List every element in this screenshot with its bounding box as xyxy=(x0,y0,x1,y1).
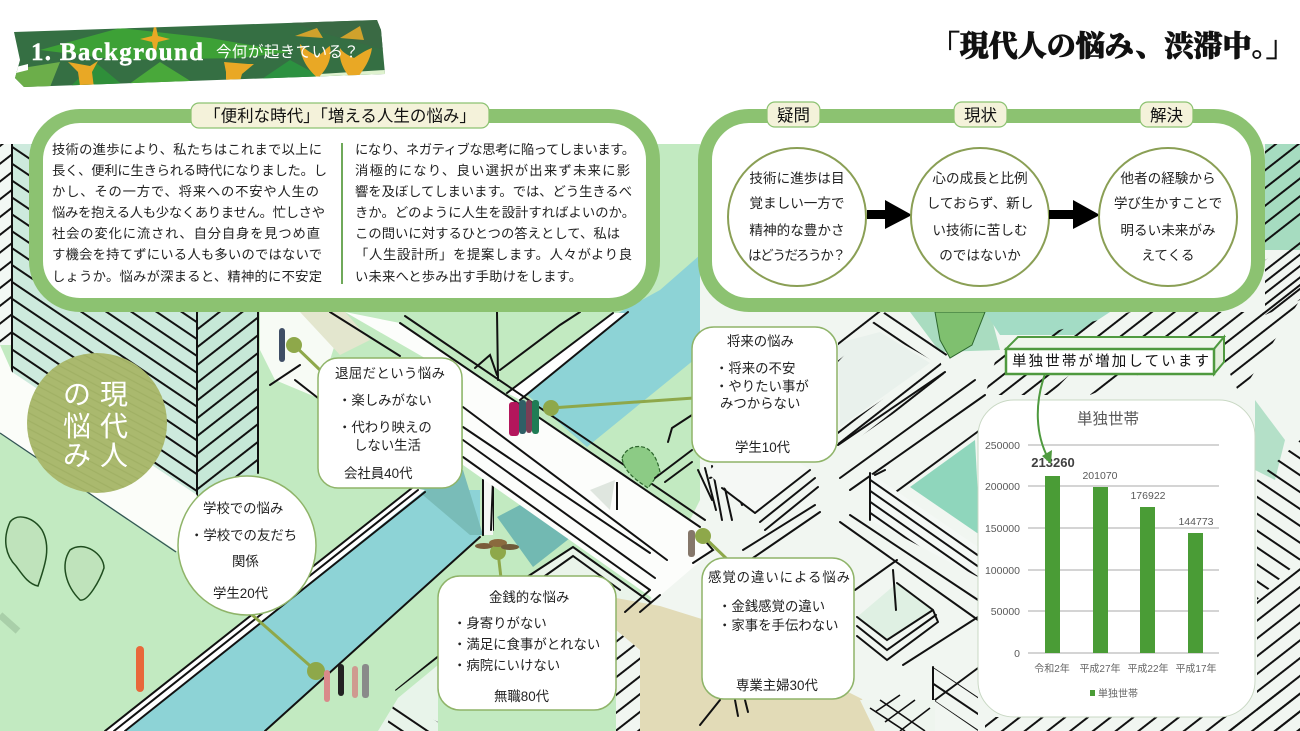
circle: status xyxy=(911,148,1049,286)
circle: question: はどうだろうか？ xyxy=(748,248,846,263)
text block: right column: きか。どのように人生を設計すればよいのか。 xyxy=(355,205,635,220)
callout: single households increasing: 単独世帯が増加しています xyxy=(1012,353,1209,370)
people: housewife xyxy=(688,530,695,557)
block C xyxy=(871,474,898,501)
value labels: 176922 xyxy=(1130,490,1166,502)
callout: sense of values: 専業主婦30代 xyxy=(736,677,818,693)
value labels: 144773 xyxy=(1178,516,1214,528)
badge: 現代人の悩み: 代 xyxy=(100,411,128,442)
header ribbon: 1. Background xyxy=(14,20,385,87)
text block: left column: 悩みを抱える人も少なくありません。忙しさや xyxy=(52,205,325,220)
bridge xyxy=(345,312,713,600)
text block: right column: 消極的になり、良い選択が出来ず未来に影 xyxy=(355,163,630,178)
x axis labels: 平成22年 xyxy=(1127,662,1169,675)
arrow: callout to chart xyxy=(1038,374,1052,464)
people: woman in orange xyxy=(136,646,144,692)
chart title: 単独世帯 xyxy=(1077,410,1139,428)
text block: right column: 「人生設計所」を提案します。人々がより良 xyxy=(355,247,632,262)
people: student group xyxy=(324,664,369,702)
lower centre buildings xyxy=(378,665,438,731)
callout: school: ・学校での友だち xyxy=(190,528,297,543)
callout: single households increasing xyxy=(1006,337,1224,374)
callout: boredom: ・代わり映えの xyxy=(338,420,432,435)
building south of bridge xyxy=(532,548,650,604)
callout: sense of values: 感覚の違いによる悩み xyxy=(708,569,850,585)
block D xyxy=(857,583,933,640)
callout: future xyxy=(692,327,837,462)
text block: right column: い未来へと歩み出す手助けをします。 xyxy=(355,269,582,284)
tag: 現状: 現状 xyxy=(964,106,998,125)
circle: solution: 他者の経験から xyxy=(1120,171,1216,186)
text block: left column xyxy=(52,142,327,284)
circle: question: 精神的な豊かさ xyxy=(749,223,845,238)
connectors and people xyxy=(136,328,730,702)
callout: school: 学校での悩み xyxy=(203,501,283,516)
x axis labels: 平成27年 xyxy=(1079,662,1121,675)
circle: question xyxy=(728,148,866,286)
text block: left column: かし、その一方で、将来への不安や人生の xyxy=(52,184,319,199)
header ribbon: 1. Background: 今何が起きている？ xyxy=(216,43,359,61)
value labels xyxy=(1031,455,1214,528)
circle: solution xyxy=(1099,148,1237,286)
circle: solution: 学び生かすことで xyxy=(1114,196,1222,211)
bars xyxy=(1045,476,1203,653)
tag: 解決 xyxy=(1140,102,1193,127)
panel: background explanation xyxy=(36,103,653,305)
value labels: 213260 xyxy=(1031,455,1075,470)
circle: status: のではないか xyxy=(939,248,1021,263)
callout: boredom: しない生活 xyxy=(354,438,421,453)
text block: right column: 響を及ぼしてしまいます。では、どう生きるべ xyxy=(355,184,632,199)
circle: status: 心の成長と比例 xyxy=(932,171,1028,186)
upper canal xyxy=(525,255,700,447)
text block: left column: す機会を持てずにいる人も多いのではないで xyxy=(52,247,322,262)
text block: left column: 社会の変化に流され、自分自身を見つめ直 xyxy=(52,226,320,241)
heading: 便利な時代: 「便利な時代」「増える人生の悩み」 xyxy=(204,106,476,126)
text block: right column xyxy=(355,141,635,284)
value labels: 201070 xyxy=(1082,470,1118,482)
block A xyxy=(838,332,930,427)
left building xyxy=(12,144,197,495)
callout: sense of values: ・金銭感覚の違い xyxy=(718,598,825,614)
gridlines and y axis: 0 xyxy=(1014,648,1020,660)
beige plaza xyxy=(616,598,875,731)
right side strips xyxy=(985,312,1130,395)
people: students on bridge xyxy=(509,400,539,436)
badge: 現代人の悩み: の xyxy=(63,379,91,410)
tag: 解決: 解決 xyxy=(1150,106,1183,125)
block B xyxy=(707,465,742,502)
circle: solution: 明るい未来がみ xyxy=(1120,223,1216,238)
x axis labels xyxy=(1034,662,1217,675)
gridlines and y axis: 50000 xyxy=(991,606,1020,618)
panel: question, status, solution xyxy=(705,102,1258,305)
circle: question: 技術に進歩は目 xyxy=(749,171,845,186)
gridlines and y axis: 100000 xyxy=(985,565,1020,577)
callout: money: ・身寄りがない xyxy=(453,616,547,631)
text block: left column: 技術の進歩により、私たちはこれまで以上に xyxy=(52,142,322,157)
callout: sense of values: ・家事を手伝わない xyxy=(718,618,839,633)
arrow xyxy=(867,200,912,229)
text block: right column: になり、ネガティブな思考に陥ってしまいます。 xyxy=(355,141,635,157)
callout: school: 関係 xyxy=(232,554,259,569)
callout: future: みつからない xyxy=(720,396,800,411)
text block: left column: しょうか。悩みが深まると、精神的に不安定 xyxy=(52,269,322,284)
callout: money: 無職80代 xyxy=(494,689,550,704)
callout: future: 将来の悩み xyxy=(727,334,794,349)
x axis labels: 令和2年 xyxy=(1034,662,1070,675)
block E xyxy=(933,667,978,731)
lower canal xyxy=(125,490,480,731)
callout: boredom: 退屈だという悩み xyxy=(335,366,445,381)
river banks xyxy=(105,488,425,731)
teal courtyards xyxy=(910,312,1000,352)
tag: 現状 xyxy=(954,102,1007,127)
callout: future: ・やりたい事が xyxy=(715,379,809,394)
panel: bar chart single households xyxy=(978,400,1255,717)
callout: boredom: 会社員40代 xyxy=(344,466,413,481)
people: office worker xyxy=(279,328,285,362)
gridlines and y axis: 150000 xyxy=(985,523,1020,535)
x axis labels: 平成17年 xyxy=(1175,662,1217,675)
text block: left column: 長く、便利に生きられる時代になりました。し xyxy=(52,163,327,178)
arrow xyxy=(1049,200,1100,229)
people: elderly group xyxy=(475,539,519,550)
tag: 疑問: 疑問 xyxy=(777,106,810,125)
badge: 現代人の悩み: 現 xyxy=(100,379,128,410)
legend: 単独世帯 xyxy=(1098,687,1138,700)
upper lawn roads xyxy=(507,313,625,400)
callout: money: ・病院にいけない xyxy=(453,658,560,673)
gridlines and y axis xyxy=(985,440,1219,660)
callout: boredom: ・楽しみがない xyxy=(338,393,432,408)
circle: status: い技術に苦しむ xyxy=(932,223,1028,238)
callout: money xyxy=(438,576,616,710)
badge: 現代人の悩み xyxy=(27,353,167,493)
text block: right column: この問いに対するひとつの答えとして、私は xyxy=(355,225,620,241)
tag: 疑問 xyxy=(767,102,820,127)
badge: 現代人の悩み: 人 xyxy=(100,440,128,471)
trees on lawn xyxy=(6,517,47,586)
callout: money: 金銭的な悩み xyxy=(489,590,569,605)
header ribbon: 1. Background: 1. Background xyxy=(31,39,203,66)
circle: status: しておらず、新し xyxy=(927,196,1033,211)
side road xyxy=(260,312,334,397)
diagonal road xyxy=(838,372,985,500)
badge: 現代人の悩み: 悩 xyxy=(63,411,91,442)
gridlines and y axis: 200000 xyxy=(985,481,1020,493)
callout: money: ・満足に食事がとれない xyxy=(453,637,600,652)
callout: boredom xyxy=(318,358,462,488)
callout: future: 学生10代 xyxy=(735,440,791,455)
lawn trees and road near bridge xyxy=(622,446,660,488)
title: 「現代人の悩み、渋滞中。」 xyxy=(931,30,1295,63)
callout: school: 学生20代 xyxy=(213,586,269,601)
circle: question: 覚ましい一方で xyxy=(749,196,845,211)
callout: future: ・将来の不安 xyxy=(715,361,795,376)
circle: solution: えてくる xyxy=(1141,248,1195,263)
gridlines and y axis: 250000 xyxy=(985,440,1020,452)
badge: 現代人の悩み: み xyxy=(63,440,91,471)
road under building xyxy=(0,345,197,552)
callout: school xyxy=(178,476,316,615)
heading: 便利な時代 xyxy=(191,103,489,128)
callout: sense of values xyxy=(702,558,854,699)
